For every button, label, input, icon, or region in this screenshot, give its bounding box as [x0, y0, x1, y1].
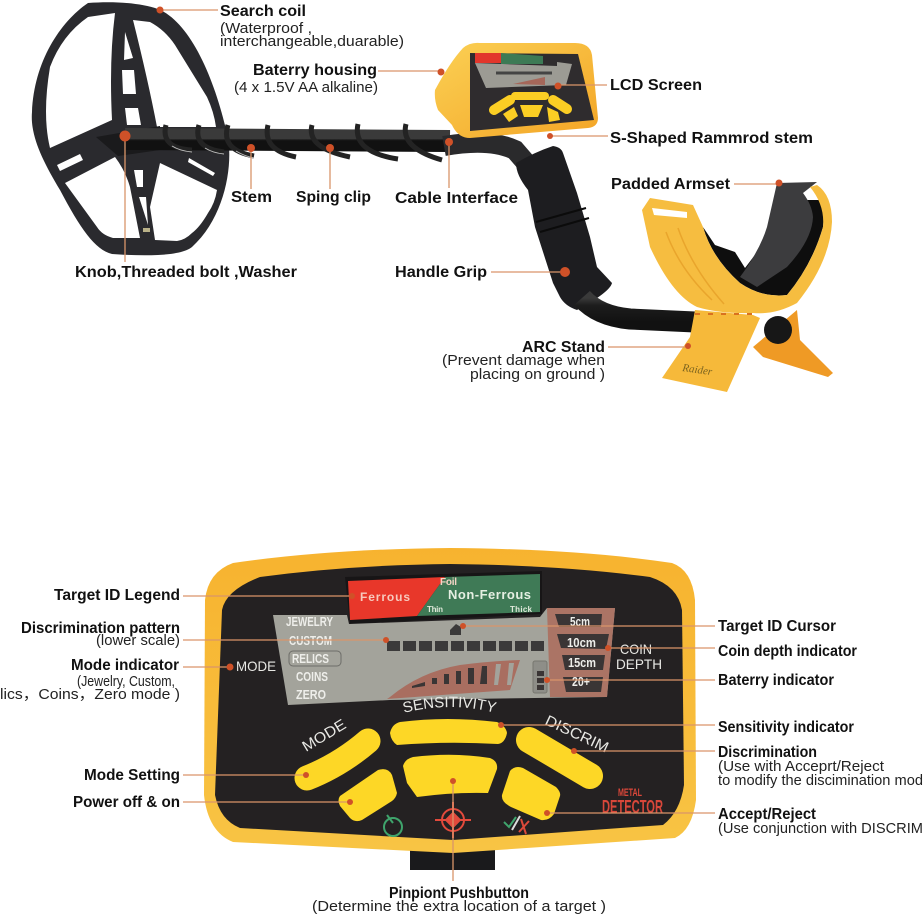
- mode list: JEWELRY: [286, 614, 333, 629]
- LCD display: 5cm: [570, 614, 590, 629]
- label: LCD screen: LCD Screen: [610, 77, 702, 94]
- label: discrimination: [718, 744, 923, 789]
- printed: sensitivity: SENSITIVITY: [403, 696, 497, 712]
- mode list: COINS: [296, 669, 328, 684]
- mode list: RELICS: [292, 651, 329, 666]
- target ID legend: Foil: [440, 577, 457, 588]
- mode list: CUSTOM: [289, 633, 332, 648]
- printed: metal detector: METAL: [618, 787, 642, 799]
- panel face: [215, 564, 684, 840]
- label: mode setting: Mode Setting: [84, 767, 180, 784]
- LCD display: 20+: [572, 674, 590, 689]
- target ID legend: Ferrous: [360, 590, 410, 604]
- sensitivity meter: [387, 660, 520, 699]
- target cursor: [450, 624, 461, 635]
- target ID legend: Thin: [427, 605, 443, 614]
- icon: pinpoint target: [435, 802, 471, 838]
- label: battery indicator: Baterry indicator: [718, 672, 834, 689]
- pinpoint button: [403, 755, 497, 797]
- label: target ID cursor: Target ID Cursor: [718, 618, 836, 635]
- stand logo: Raider: [681, 362, 714, 378]
- telescopic stem with spring clips: [125, 124, 450, 160]
- icon: power: [384, 815, 402, 836]
- mode list: ZERO: [296, 687, 326, 702]
- power button: [338, 769, 397, 821]
- printed: metal detector: DETECTOR: [602, 797, 663, 817]
- label: spring clip: Sping clip: [296, 189, 371, 206]
- label: pinpoint pushbutton: [312, 885, 606, 915]
- ARC stand legs: [662, 310, 833, 392]
- label: S-shaped rod: S-Shaped Rammrod stem: [610, 130, 813, 147]
- metal detector product photo: [32, 2, 833, 392]
- coin depth frame: [547, 608, 615, 697]
- label: coin depth indicator: Coin depth indicator: [718, 643, 857, 660]
- label: ARC stand: (Prevent damage when: [442, 352, 605, 369]
- label: target ID legend: Target ID Legend: [54, 587, 180, 604]
- label: mode indicator: (Jewelry, Custom,: [77, 673, 175, 690]
- label: ARC stand: placing on ground ): [470, 366, 605, 383]
- sensitivity button: [390, 719, 507, 745]
- label: pinpoint pushbutton: Pinpiont Pushbutton: [389, 885, 529, 902]
- accept reject button: [502, 767, 560, 820]
- label: discrimination pattern: (lower scale): [96, 632, 180, 649]
- label: battery housing: (4 x 1.5V AA alkaline): [234, 79, 378, 96]
- label: search coil: [220, 3, 404, 50]
- arm cuff: [642, 182, 832, 313]
- label: discrimination: (Use with Acceprt/Reject: [718, 758, 885, 775]
- shaft below panel: [410, 846, 495, 870]
- label: knob: Knob,Threaded bolt ,Washer: [75, 264, 297, 281]
- label: mode indicator: Mode indicator: [71, 657, 179, 674]
- target ID legend: [345, 571, 542, 624]
- label: mode indicator: [0, 657, 180, 703]
- printed: coin depth: COIN: [620, 641, 652, 657]
- label: pinpoint pushbutton: (Determine the extra location of a target ): [312, 898, 606, 915]
- label: discrimination pattern: Discrimination pattern: [21, 620, 180, 637]
- label: accept reject: Accept/Reject: [718, 806, 817, 823]
- leader lines, upper diagram: [120, 6, 782, 349]
- target ID legend: Non-Ferrous: [448, 587, 531, 602]
- label: search coil: interchangeable,duarable): [220, 33, 404, 50]
- panel frame: [204, 548, 696, 853]
- label: ARC stand: ARC Stand: [522, 339, 605, 356]
- label: mode indicator: lics，Coins，Zero mode ): [0, 686, 180, 703]
- handle grip: [516, 146, 612, 310]
- discrimination bars: [387, 641, 544, 651]
- label: stem: Stem: [231, 189, 272, 206]
- S-shaped rod: [444, 143, 534, 172]
- control panel enlarged: [204, 548, 696, 870]
- printed: MODE button caption: MODE: [299, 716, 349, 755]
- label: battery housing: [234, 62, 378, 96]
- icon: accept reject: [504, 816, 529, 834]
- battery icon: [533, 661, 547, 693]
- LCD display: 10cm: [567, 635, 596, 650]
- mode button: [307, 741, 368, 778]
- label: search coil: (Waterproof ,: [220, 20, 312, 37]
- label: cable interface: Cable Interface: [395, 190, 518, 207]
- leader lines, control panel: [183, 593, 715, 881]
- target ID legend: Thick: [510, 605, 533, 614]
- printed: MODE: MODE: [236, 658, 276, 674]
- LCD display: [273, 608, 615, 705]
- LCD display: 15cm: [568, 655, 596, 670]
- console head: [435, 43, 598, 138]
- label: battery housing: Baterry housing: [253, 62, 377, 79]
- label: sensitivity indicator: Sensitivity indicator: [718, 719, 854, 736]
- label: ARC stand: [442, 339, 605, 383]
- label: padded armset: Padded Armset: [611, 176, 731, 193]
- label: search coil: Search coil: [220, 3, 306, 20]
- label: power: Power off & on: [73, 794, 180, 811]
- printed: coin depth: DEPTH: [616, 656, 662, 672]
- printed: coin depth: [616, 641, 662, 672]
- lower rod: [582, 298, 695, 322]
- label: discrimination pattern: [21, 620, 180, 649]
- label: discrimination: Discrimination: [718, 744, 817, 761]
- printed: metal detector: [602, 787, 663, 817]
- label: handle grip: Handle Grip: [395, 264, 487, 281]
- printed: DISCRIM button caption: DISCRIM: [542, 712, 611, 756]
- label: discrimination: to modify the discimination mod: [718, 772, 923, 789]
- label: accept reject: (Use conjunction with DISCRIM: [718, 820, 923, 837]
- search coil: [32, 2, 229, 255]
- mode list: [286, 614, 341, 702]
- discrimination button: [529, 740, 590, 776]
- label: accept reject: [718, 806, 923, 837]
